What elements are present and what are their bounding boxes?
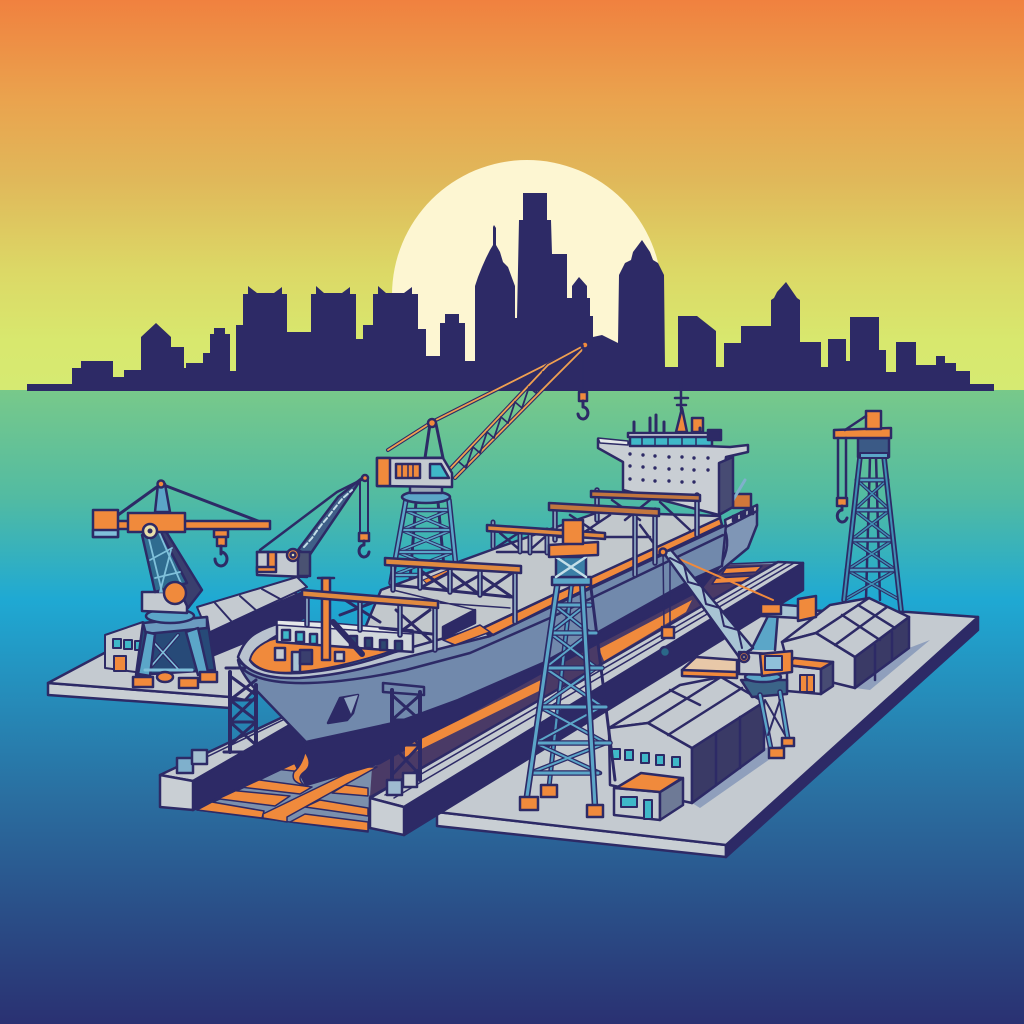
small orange roof building (614, 773, 683, 820)
dark lower hull (296, 562, 722, 785)
deck gantries (302, 490, 700, 650)
foreground dark scaffold left (224, 668, 256, 752)
far right tower crane (834, 411, 901, 610)
center warehouse (609, 677, 764, 803)
deck rim and bow (238, 623, 490, 678)
cargo hatch (393, 590, 510, 638)
foreground tower feet (520, 785, 603, 817)
city skyline silhouette (27, 193, 994, 391)
water background (0, 390, 1024, 1024)
grey hull side (238, 525, 726, 742)
foreground dark scaffold right (383, 683, 424, 795)
left crane (93, 480, 270, 688)
orange king post (322, 578, 330, 660)
ship (238, 385, 757, 785)
orange bow deck (250, 632, 395, 673)
anchor hole (328, 695, 358, 723)
left crane hook (214, 530, 228, 566)
mid gantry (487, 522, 605, 553)
deck surface (360, 512, 720, 655)
mid aft gantry (549, 503, 659, 575)
right crane lower tower (741, 672, 794, 758)
central crane boom (449, 345, 585, 478)
bridge (628, 385, 721, 446)
left crane arm (142, 525, 202, 608)
right warehouse (782, 598, 909, 688)
big central crane (377, 342, 588, 583)
far aft gantry (591, 490, 700, 535)
foremost gantry (302, 590, 438, 650)
left dock wall (160, 717, 320, 810)
right mid crane (660, 548, 816, 758)
bow deck equipment (275, 648, 344, 672)
sun (392, 160, 662, 430)
hull sheer line (244, 535, 723, 683)
left platform (48, 585, 300, 708)
second crane on long warehouse (257, 475, 369, 577)
dry dock floor (197, 562, 778, 832)
small right building with orange doors (787, 658, 833, 694)
bow deckhouse (277, 620, 413, 652)
left long warehouse (197, 577, 307, 657)
right dock wall (370, 562, 803, 835)
stern deck detail (733, 480, 753, 521)
keel plank (263, 767, 377, 822)
left small building (105, 622, 143, 673)
raft (682, 657, 737, 676)
stern hull (690, 505, 757, 580)
central crane cab (377, 458, 452, 487)
foreground tower crane (520, 520, 615, 817)
left crane tower (133, 617, 217, 688)
side orange strip (483, 518, 722, 635)
rudder (293, 752, 309, 785)
sky background (0, 0, 1024, 392)
aft castle portholes (628, 452, 710, 484)
forward gantry (385, 558, 521, 622)
central crane tower (391, 500, 457, 583)
right platform (437, 610, 978, 857)
orange boot stripe (405, 680, 541, 757)
aft castle (598, 439, 748, 515)
